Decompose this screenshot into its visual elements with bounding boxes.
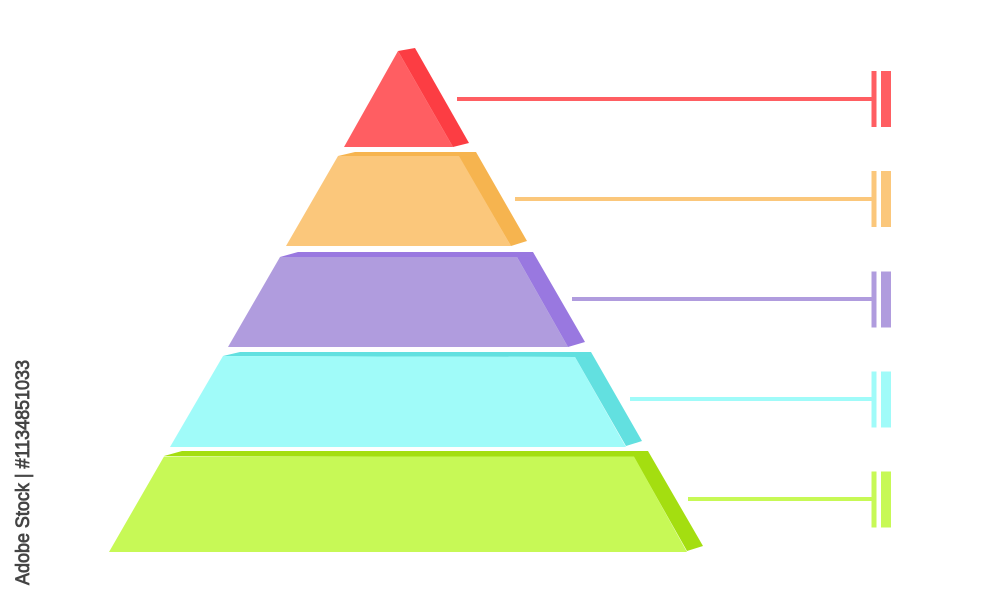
- connector: orange: [515, 171, 891, 227]
- connector: cyan: [630, 372, 891, 428]
- tier 2: orange: [286, 152, 527, 246]
- connector: red: [457, 71, 891, 127]
- tier 3: purple: [228, 252, 585, 347]
- tier 4: cyan: [170, 352, 642, 447]
- connector: green: [688, 472, 891, 528]
- pyramid: [109, 48, 703, 552]
- tier 5: green: [109, 451, 703, 552]
- vertical stock credit text: Adobe Stock | #1134851033: [12, 360, 34, 585]
- connector: purple: [572, 272, 891, 328]
- tier 1: red apex: [344, 48, 469, 147]
